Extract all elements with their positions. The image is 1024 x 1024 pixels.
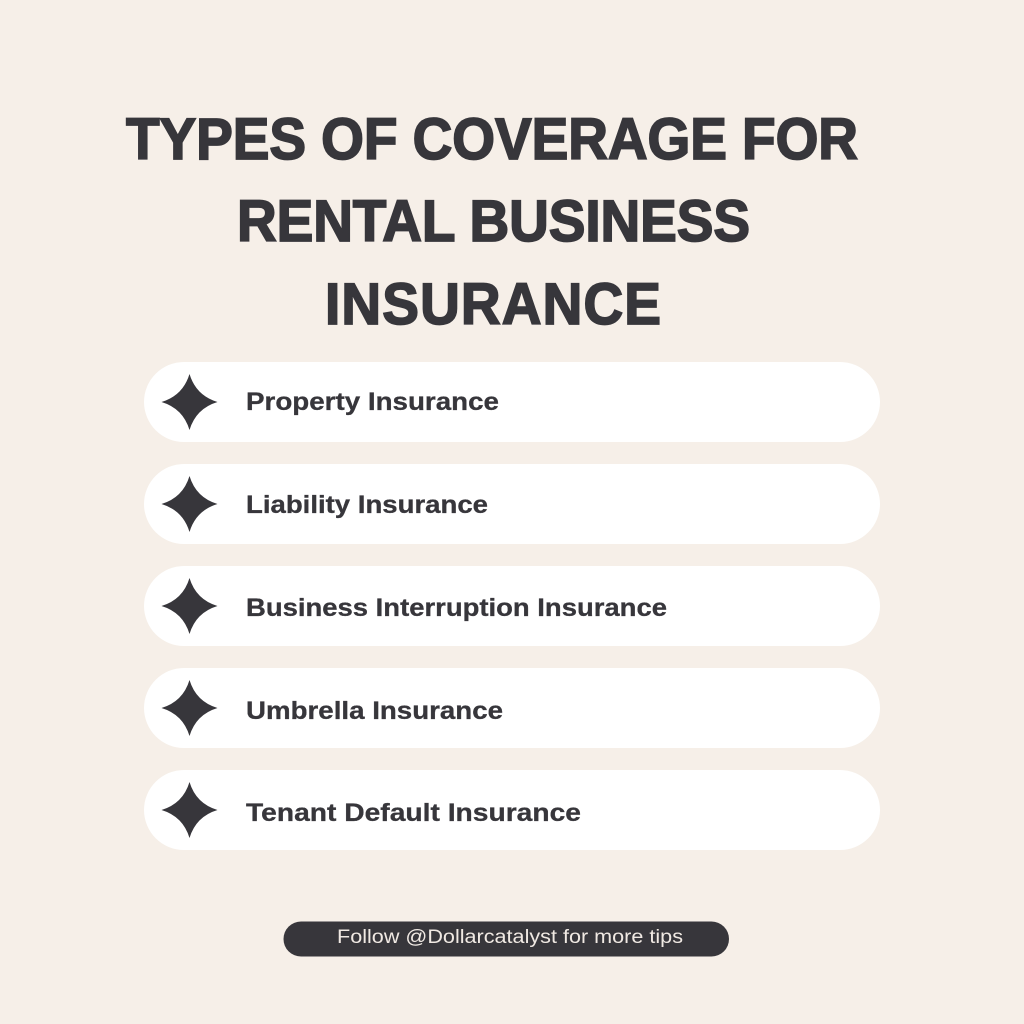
label: umbrella insurance: Umbrella Insurance — [246, 697, 503, 725]
panel: property insurance — [144, 362, 880, 442]
icon: four-point star — [162, 578, 218, 634]
panel: business interruption insurance — [144, 566, 880, 646]
title: INSURANCE — [325, 273, 661, 337]
panel: liability insurance — [144, 464, 880, 544]
title: TYPES OF COVERAGE FOR — [126, 108, 858, 172]
panel: umbrella insurance — [144, 668, 880, 748]
title — [126, 108, 858, 337]
icon: four-point star — [162, 476, 218, 532]
label: liability insurance: Liability Insurance — [246, 491, 488, 519]
label: property insurance: Property Insurance — [246, 388, 499, 416]
label: tenant default insurance: Tenant Default Insurance — [246, 799, 581, 827]
icon: four-point star — [162, 374, 218, 430]
footer call to action: Follow @Dollarcatalyst for more tips — [337, 927, 683, 948]
panel: tenant default insurance — [144, 770, 880, 850]
icon: four-point star — [162, 680, 218, 736]
title: RENTAL BUSINESS — [237, 190, 750, 254]
icon: four-point star — [162, 782, 218, 838]
label: business interruption insurance: Business Interruption Insurance — [246, 594, 667, 622]
footer call to action — [284, 922, 729, 956]
